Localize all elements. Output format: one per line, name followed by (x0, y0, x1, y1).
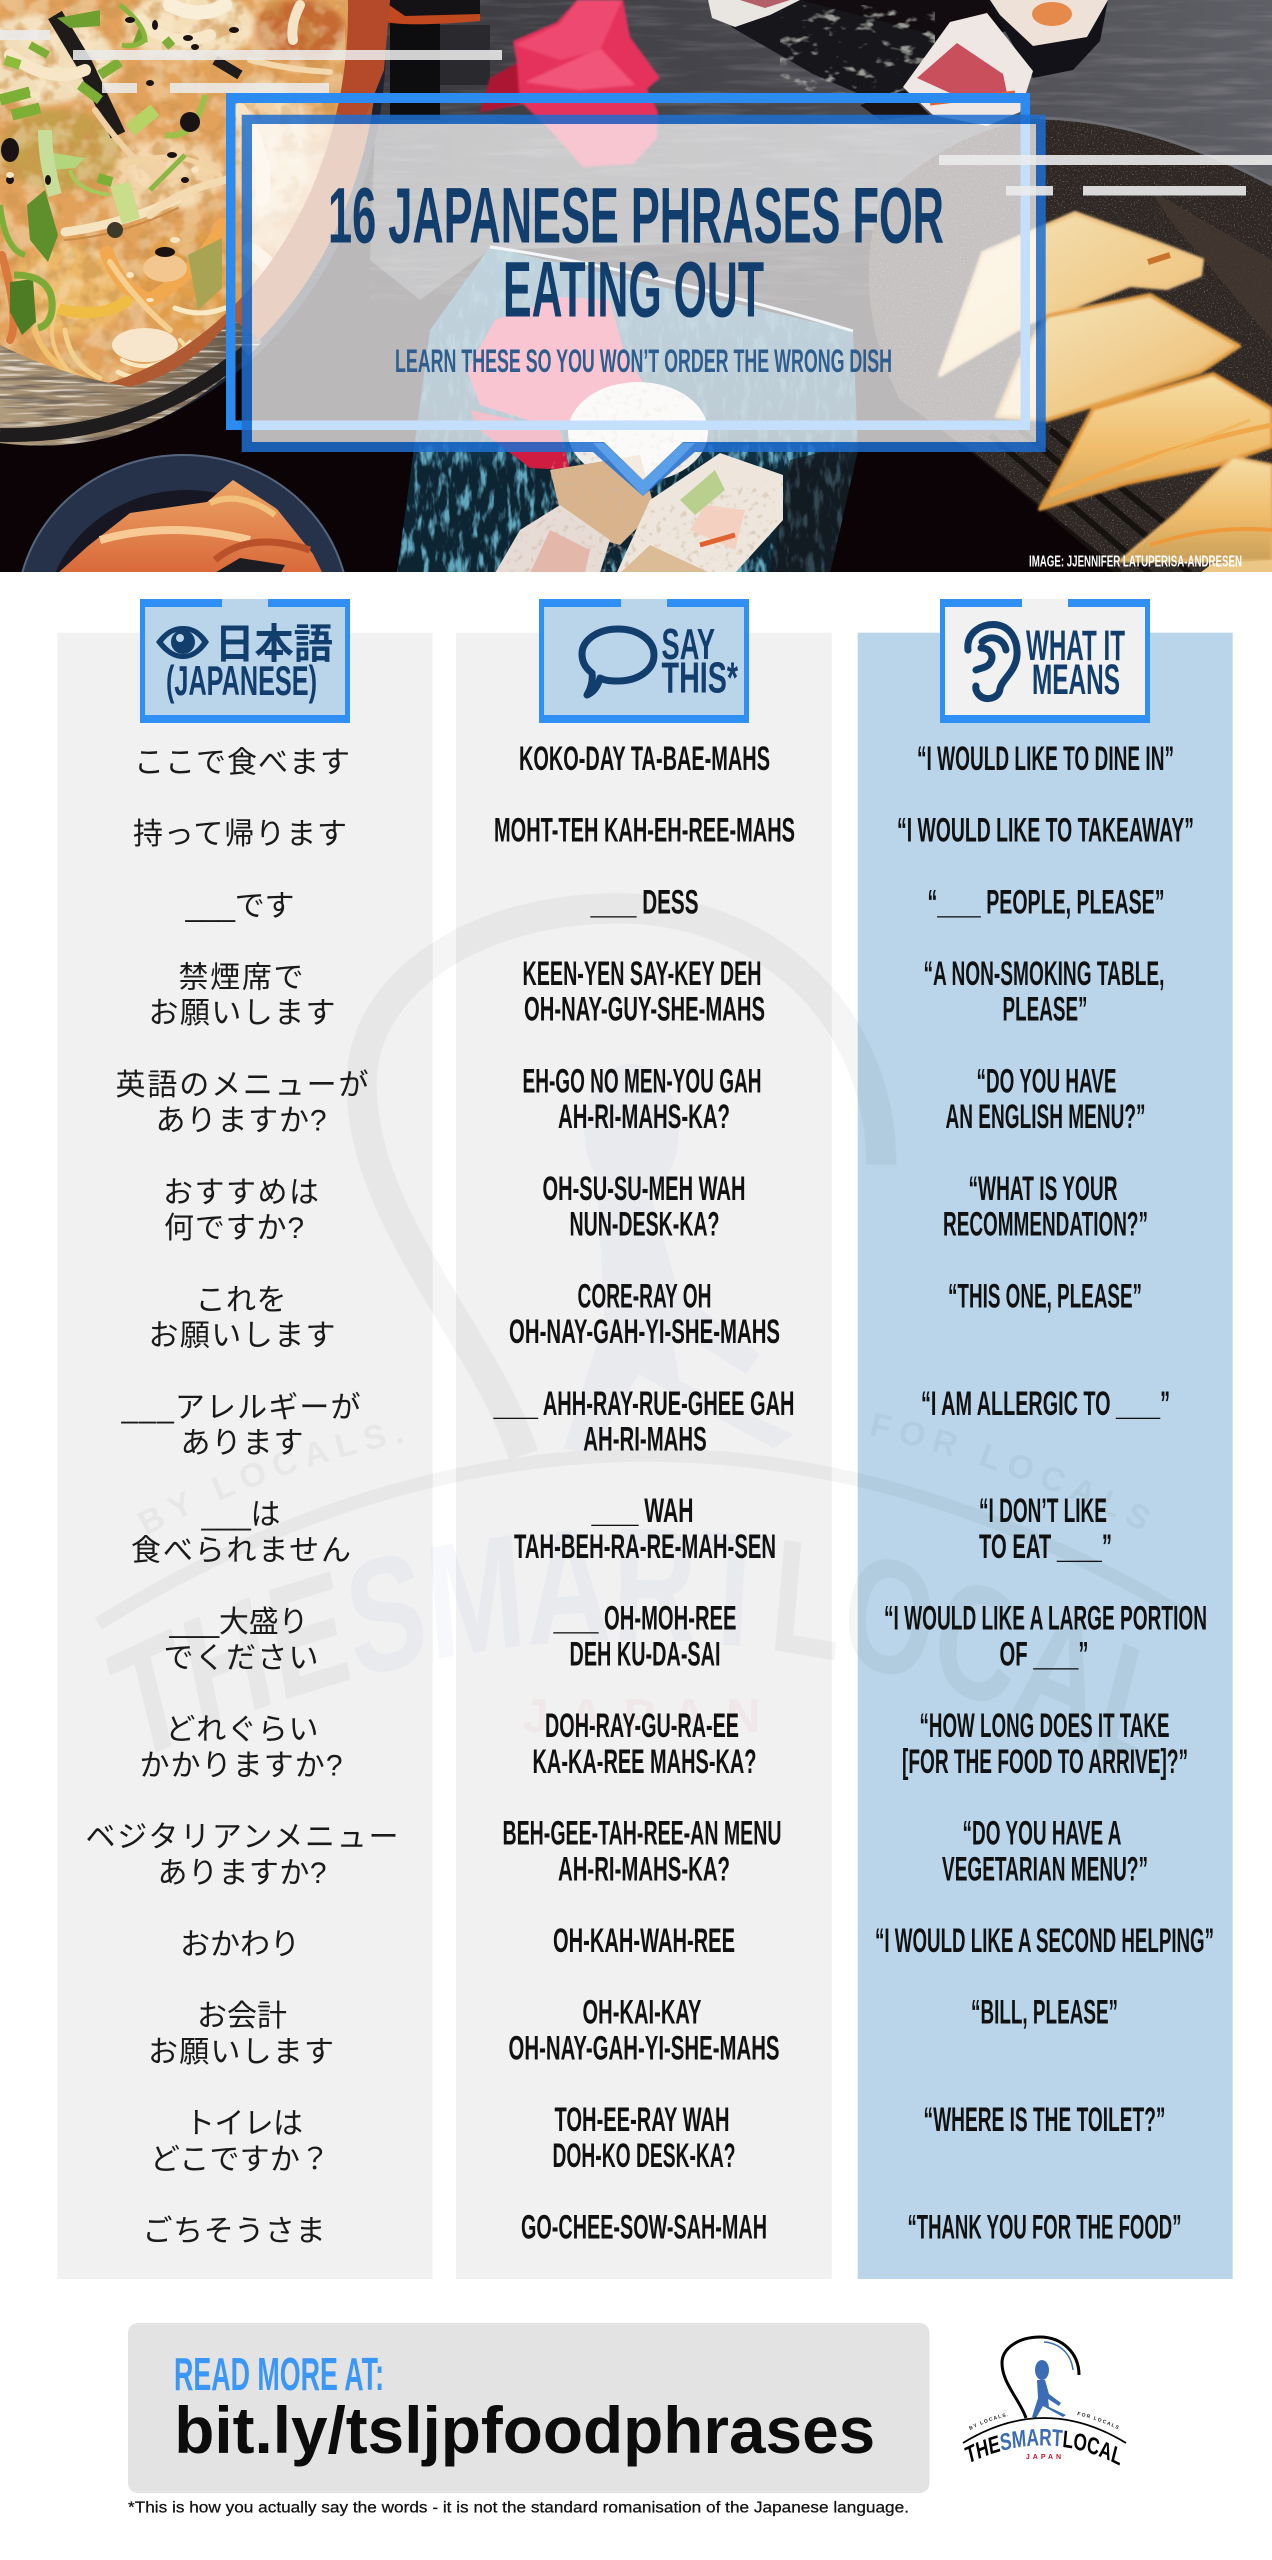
photo: spring onion and greens (0, 5, 205, 335)
pronunciation 9: TAH-BEH-RA-RE-MAH-SEN (514, 1528, 776, 1566)
pronunciation 2: MOHT-TEH KAH-EH-REE-MAHS (494, 812, 795, 850)
icon: eye (156, 626, 209, 659)
meaning 10: OF ____” (1000, 1636, 1088, 1674)
phrase 12: ありますか? (158, 1857, 326, 1890)
banner translucent panel (252, 124, 1036, 480)
logo: walking figure (1032, 2360, 1066, 2418)
pronunciation 4: KEEN-YEN SAY-KEY DEH (522, 955, 762, 993)
photo: bowl rim (0, 318, 262, 446)
phrase 7: これを (196, 1284, 286, 1317)
title (328, 172, 944, 334)
pronunciation 10 (553, 1600, 736, 1674)
pronunciation 15 (552, 2101, 736, 2175)
pronunciation 6: OH-SU-SU-MEH WAH (542, 1170, 746, 1208)
pronunciation 7: CORE-RAY OH (578, 1277, 712, 1315)
phrase 11: どれぐらい (166, 1714, 318, 1747)
meaning 9: “I DON’T LIKE (979, 1492, 1107, 1530)
meaning 12: “DO YOU HAVE A (962, 1815, 1122, 1853)
phrase 8: あります (180, 1427, 304, 1460)
phrase 5 (116, 1069, 368, 1138)
meaning 9 (979, 1492, 1112, 1566)
phrase 15 (150, 2108, 330, 2176)
meaning 6 (943, 1170, 1148, 1244)
phrase 8 (120, 1391, 360, 1460)
pronunciation 4 (522, 955, 765, 1029)
pronunciation 10: DEH KU-DA-SAI (570, 1636, 720, 1674)
decorative strips: top left (0, 30, 502, 93)
phrase 10: でください (164, 1642, 318, 1675)
phrase 4: 禁煙席で (178, 961, 304, 994)
phrase 13: おかわり (180, 1929, 300, 1962)
meaning 12 (942, 1815, 1148, 1888)
logo: Japan: JAPAN (1026, 2454, 1064, 2461)
logo: light bulb outline (1002, 2337, 1079, 2418)
meaning 5: “DO YOU HAVE (976, 1062, 1116, 1100)
meaning 9: TO EAT ____” (979, 1528, 1112, 1566)
pronunciation 14: OH-KAI-KAY (582, 1994, 702, 2032)
pronunciation 16: GO-CHEE-SOW-SAH-MAH (521, 2209, 767, 2247)
meaning 4 (924, 955, 1164, 1029)
pronunciation 12: BEH-GEE-TAH-REE-AN MENU (502, 1815, 782, 1853)
phrase 10: ___大盛り (168, 1606, 308, 1639)
header text: (Japanese): (JAPANESE) (166, 657, 317, 704)
phrase 6: 何ですか? (164, 1212, 304, 1245)
phrase 14: お願いします (148, 2036, 334, 2069)
watermark logo: JAPAN (523, 1690, 781, 1743)
pronunciation 1: KOKO-DAY TA-BAE-MAHS (519, 740, 770, 778)
pronunciation 5: EH-GO NO MEN-YOU GAH (522, 1062, 762, 1100)
phrase 2: 持って帰ります (133, 818, 347, 851)
pronunciation 14: OH-NAY-GAH-YI-SHE-MAHS (508, 2030, 780, 2068)
banner front frame (242, 115, 1046, 496)
header text: This: THIS* (662, 654, 739, 703)
panel: Say this column background (456, 633, 832, 2279)
banner back frame (226, 93, 1030, 430)
header text: Japanese kanji: 日本語 (215, 621, 333, 667)
phrase 9: 食べられません (131, 1534, 351, 1568)
photo: nori strip (55, 15, 118, 135)
phrase 5: 英語のメニューが (116, 1069, 368, 1102)
phrase 14 (148, 2000, 334, 2069)
pronunciation 14 (508, 1994, 780, 2068)
hero photo: sushi, noodles and dumplings (0, 0, 1272, 572)
header badge: What it means (940, 599, 1150, 723)
phrase 16: ごちそうさま (142, 2215, 326, 2248)
pronunciation 10: ____ OH-MOH-REE (553, 1600, 736, 1638)
phrase 7 (148, 1284, 336, 1353)
panel: What it means column background (858, 633, 1233, 2279)
meaning 10 (884, 1600, 1207, 1674)
phrases translated into English (875, 740, 1214, 2247)
icon: speech bubble (582, 629, 654, 695)
photo: dark plate with dumplings (850, 110, 1272, 575)
meaning 6: “WHAT IS YOUR (968, 1170, 1118, 1208)
header text: Means: MEANS (1032, 656, 1120, 704)
pronunciation 11: DOH-RAY-GU-RA-EE (545, 1707, 739, 1745)
photo: blue plate with ginger and maki rolls (390, 240, 870, 575)
pronunciation 8 (493, 1385, 794, 1459)
header text: What it: WHAT IT (1026, 622, 1125, 670)
phrase 5: ありますか? (156, 1105, 326, 1138)
pronunciation 9 (514, 1492, 776, 1566)
logo: The Smart Local Japan (962, 2336, 1126, 2466)
watermark logo: BY LOCALS. (138, 1425, 402, 1534)
phrase 4 (148, 961, 336, 1030)
decorative strips: top right (939, 155, 1272, 196)
pronunciation 8: ____ AHH-RAY-RUE-GHEE GAH (493, 1385, 794, 1423)
meaning 4: PLEASE” (1002, 991, 1088, 1029)
pronunciation 4: OH-NAY-GUY-SHE-MAHS (524, 991, 765, 1029)
logo: wordmark: THESMARTLOCAL (964, 2428, 1120, 2466)
pronunciation 8: AH-RI-MAHS (583, 1421, 707, 1459)
meaning 5 (946, 1062, 1146, 1136)
phrase 12 (86, 1821, 398, 1890)
phrase 15: トイレは (185, 2108, 303, 2141)
phrase 9 (131, 1499, 351, 1568)
photo: nori sushi rolls (707, 0, 1108, 126)
photo: noodle bowl (0, 0, 390, 450)
logo: for locals: FOR LOCALS. (1077, 2412, 1119, 2429)
pronunciation 15: TOH-EE-RAY WAH (554, 2101, 730, 2139)
watermark logo: THESMARTLOCAL (106, 1529, 1158, 1775)
watermark logo (95, 894, 1200, 1775)
photo: pink ginger (480, 0, 660, 167)
header badge: Say this (539, 599, 749, 723)
pronunciation 15: DOH-KO DESK-KA? (552, 2137, 736, 2175)
icon: ear (968, 624, 1017, 699)
short link: bit.ly/tsljpfoodphrases (174, 2393, 875, 2467)
phrase 11: かかりますか? (140, 1750, 342, 1782)
phrase 4: お願いします (148, 997, 336, 1030)
panel: Japanese column background (57, 633, 433, 2279)
watermark logo: FOR LOCALS. (870, 1413, 1149, 1528)
header text: Say: SAY (662, 620, 715, 669)
pronunciation 7 (509, 1277, 780, 1351)
header badge: Japanese (140, 599, 350, 723)
pronunciation 3: ____ DESS (590, 883, 698, 921)
phrase 3: ___です (184, 890, 294, 923)
phrase 10 (164, 1606, 318, 1675)
phrase 9: ___は (200, 1499, 280, 1532)
phrase 6 (163, 1176, 319, 1245)
pronunciation 11: KA-KA-REE MAHS-KA? (532, 1743, 756, 1781)
phrase 8: ___アレルギーが (120, 1391, 360, 1424)
pronunciation 11 (532, 1707, 756, 1781)
read more label: READ MORE AT: (174, 2348, 384, 2400)
pronunciation 5: AH-RI-MAHS-KA? (558, 1098, 730, 1136)
pronunciation 12: AH-RI-MAHS-KA? (558, 1850, 730, 1888)
pronunciation 5 (522, 1062, 762, 1136)
phrases as pronounced (493, 740, 795, 2247)
pronunciation 6 (542, 1170, 746, 1244)
pronunciation 12 (502, 1815, 782, 1888)
pronunciation 13: OH-KAH-WAH-REE (553, 1922, 735, 1960)
column: Japanese (86, 599, 398, 2248)
phrase 11 (140, 1714, 342, 1782)
photo: noodles (2, 5, 330, 382)
photo: sesame seeds (1, 17, 239, 257)
photo: small kimchi bowl (22, 454, 344, 572)
meaning 14: “BILL, PLEASE” (971, 1994, 1118, 2032)
title: EATING OUT (503, 246, 764, 334)
footnote: *This is how you actually say the words - it is not the standard romanisation of the Japanese language. (128, 2500, 909, 2516)
phrase 14: お会計 (197, 2000, 287, 2033)
read more callout (128, 2323, 930, 2493)
phrase 1: ここで食べます (134, 746, 350, 780)
pronunciation 7: OH-NAY-GAH-YI-SHE-MAHS (509, 1313, 780, 1351)
pronunciation 9: ____ WAH (591, 1492, 694, 1530)
logo: by locals: BY LOCALS. (968, 2414, 1008, 2430)
phrases in Japanese (86, 746, 398, 2248)
pronunciation 6: NUN-DESK-KA? (570, 1206, 720, 1244)
phrase 15: どこですか？ (150, 2144, 330, 2176)
column: What it means (875, 599, 1214, 2247)
column: Say this (493, 599, 795, 2247)
meaning 11 (902, 1707, 1188, 1781)
phrase 12: ベジタリアンメニュー (86, 1821, 398, 1854)
title banner (226, 93, 1046, 496)
phrase 6: おすすめは (163, 1176, 319, 1209)
phrase 7: お願いします (148, 1320, 336, 1353)
